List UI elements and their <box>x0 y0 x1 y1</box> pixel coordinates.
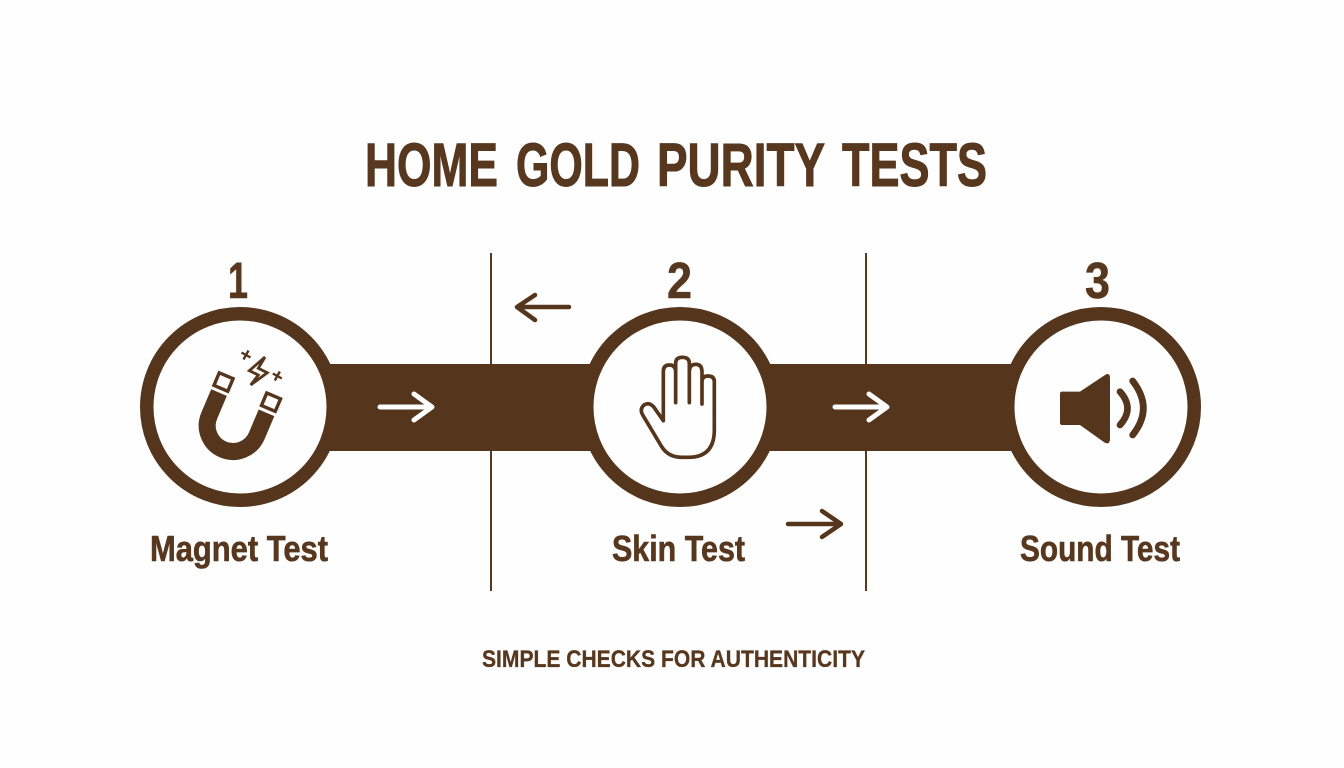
title: TESTS <box>842 131 987 199</box>
number 2: 2 <box>667 252 692 309</box>
subtitle: SIMPLE CHECKS FOR AUTHENTICITY <box>482 646 865 673</box>
number 1: 1 <box>228 252 248 309</box>
title: HOME <box>365 131 498 199</box>
divider line: right <box>865 253 867 591</box>
step 1: magnet test <box>147 252 333 569</box>
step 3: sound test <box>1008 252 1194 569</box>
arrow: band right 1 <box>380 394 432 420</box>
label: skin test: Skin Test <box>612 528 745 569</box>
title: PURITY <box>657 131 825 199</box>
icon: magnet <box>192 350 282 462</box>
connecting band <box>320 364 1030 451</box>
arrow: lower right pointing <box>788 511 841 537</box>
title <box>365 131 987 199</box>
label: sound test: Sound Test <box>1020 528 1180 569</box>
circle 3 <box>1008 314 1194 500</box>
title: GOLD <box>516 131 640 199</box>
divider line: left <box>490 253 492 591</box>
number 3: 3 <box>1085 252 1110 309</box>
icon: speaker <box>1060 374 1143 443</box>
arrow: upper left pointing <box>517 295 569 320</box>
circle 2 <box>587 314 773 500</box>
circle 1 <box>147 314 333 500</box>
arrow: band right 2 <box>835 394 887 420</box>
icon: hand <box>641 357 714 457</box>
label: magnet test: Magnet Test <box>150 528 328 569</box>
step 2: skin test <box>587 252 773 569</box>
